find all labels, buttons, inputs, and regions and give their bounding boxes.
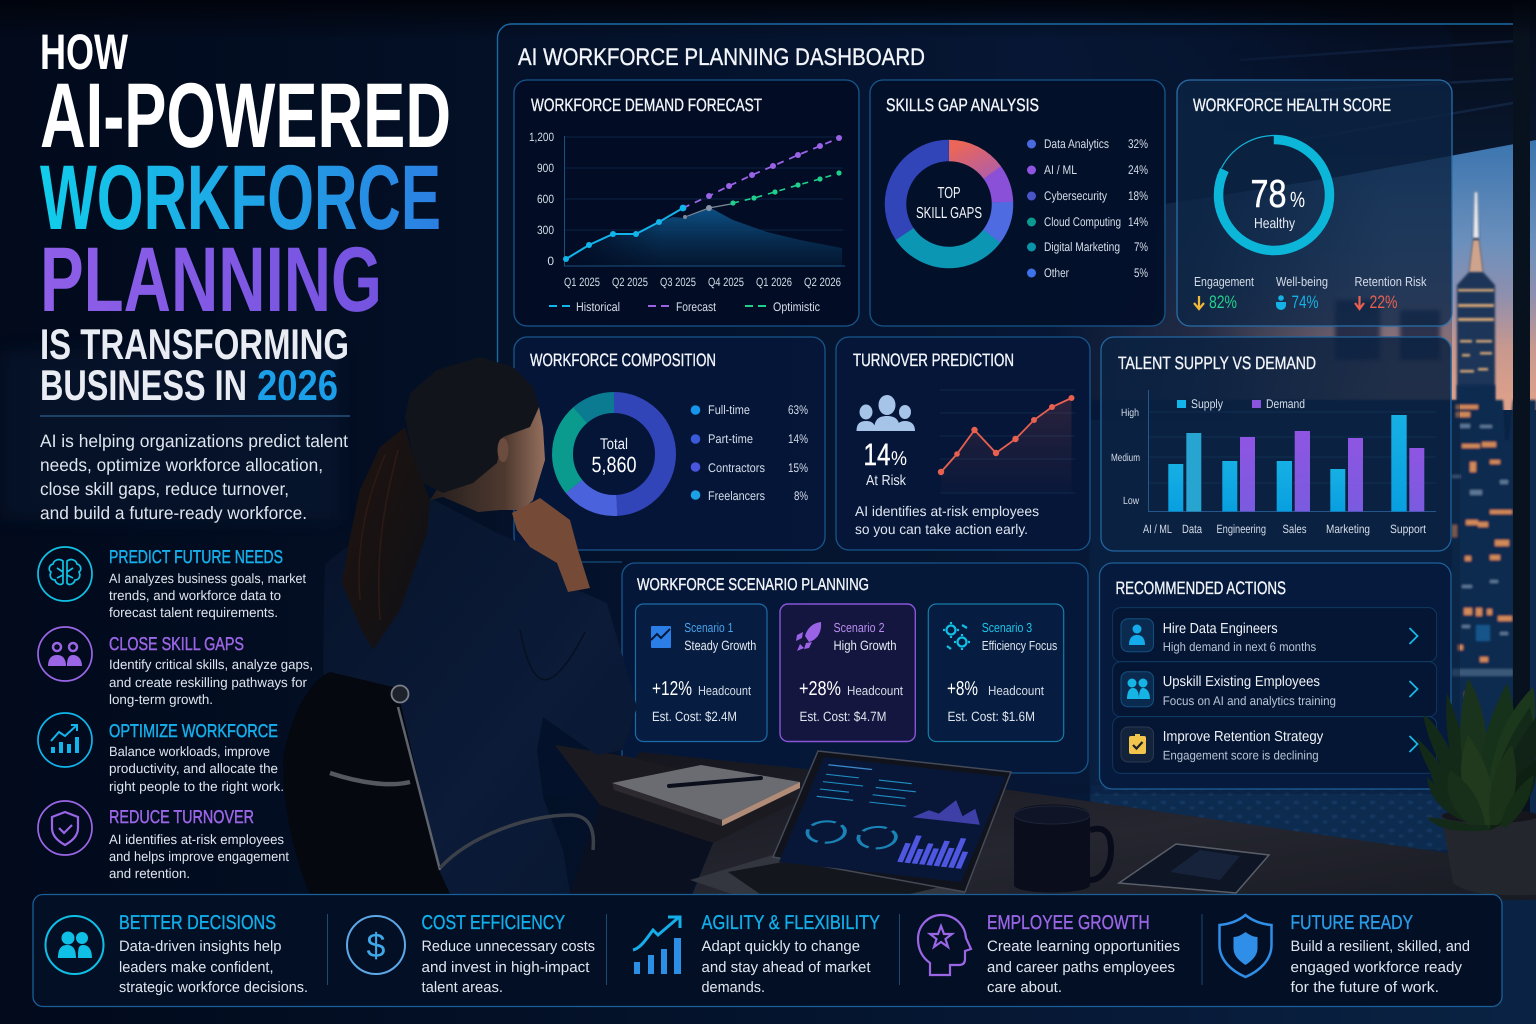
feature: reduce turnover: AI identifies at-risk employees: [109, 832, 284, 847]
line chart: 600: [537, 192, 554, 206]
health metrics: 22%: [1370, 292, 1398, 312]
action: hire data engineers: [1113, 608, 1437, 662]
composition legend: Contractors: [708, 461, 765, 475]
city below the window: [1090, 385, 1536, 850]
chart legend: Forecast: [676, 300, 716, 314]
bar chart legend: Demand: [1266, 397, 1305, 411]
main title: 2026: [257, 362, 338, 410]
feature: close skill gaps: [38, 627, 313, 707]
skills heading: SKILLS GAP ANALYSIS: [886, 95, 1039, 115]
scenario heading: WORKFORCE SCENARIO PLANNING: [637, 575, 869, 594]
laptop: [690, 751, 1011, 895]
feature: optimize workforce: [38, 713, 284, 794]
scenario card 1: steady growth: Scenario 1: [684, 620, 733, 635]
dim city on the left: [0, 350, 340, 520]
scenario card 3: efficiency focus: [928, 604, 1064, 742]
action: hire data engineers: Hire Data Engineers: [1163, 621, 1278, 637]
turnover description: AI identifies at-risk employees: [855, 503, 1039, 519]
intro paragraph: needs, optimize workforce allocation,: [40, 455, 323, 475]
line chart: Q2 2025: [612, 275, 648, 289]
icon: shield: [1220, 915, 1272, 977]
benefit: cost efficiency: Reduce unnecessary costs: [422, 938, 595, 955]
bar chart: Support: [1390, 522, 1427, 536]
turnover description: so you can take action early.: [855, 521, 1028, 537]
benefit: agility and flexibility: demands.: [702, 979, 765, 996]
line chart: Q1 2026: [756, 275, 792, 289]
coffee mug: [1014, 804, 1111, 892]
scenario card 3: efficiency focus: Efficiency Focus: [982, 638, 1058, 653]
main title: AI-POWERED: [40, 65, 451, 167]
donut chart: total 5,860: 5,860: [592, 452, 636, 477]
businesswoman seen from behind: [283, 357, 637, 894]
main title: WORKFORCE: [40, 147, 441, 249]
main title: IS TRANSFORMING: [40, 321, 349, 369]
panel: recommended actions: [1100, 563, 1451, 789]
hair: [405, 357, 539, 493]
at-risk percentage: At Risk: [866, 473, 907, 489]
benefit: agility and flexibility: and stay ahead of market: [702, 959, 871, 976]
panel: turnover prediction: [836, 337, 1090, 550]
dashboard heading: AI WORKFORCE PLANNING DASHBOARD: [518, 44, 925, 71]
action: improve retention strategy: Improve Retention Strategy: [1163, 729, 1324, 745]
intro paragraph: [40, 431, 348, 523]
action: improve retention strategy: [1113, 717, 1437, 773]
health metrics: 74%: [1292, 292, 1318, 312]
panel: skills gap analysis: [870, 80, 1165, 326]
skills legend: 14%: [1128, 215, 1148, 229]
skills legend: 7%: [1134, 240, 1148, 254]
action: upskill existing employees: Focus on AI and analytics training: [1163, 694, 1336, 708]
feature: predict future needs: forecast talent requirements.: [109, 605, 278, 620]
panel: talent supply vs demand: [1101, 337, 1451, 551]
feature: reduce turnover: and retention.: [109, 866, 190, 881]
panel: workforce composition: [514, 337, 825, 550]
line chart: 300: [537, 223, 554, 237]
feature: close skill gaps: and create reskilling pathways for: [109, 675, 307, 690]
tablet: [1119, 844, 1269, 893]
feature: predict future needs: AI analyzes business goals, market: [109, 571, 306, 586]
panel: workforce demand forecast: [514, 80, 859, 326]
dim towers behind the panels: [1335, 300, 1440, 360]
chart legend: Optimistic: [773, 300, 820, 314]
actions heading: RECOMMENDED ACTIONS: [1116, 578, 1286, 598]
line chart: Q1 2025: [564, 275, 600, 289]
feature: predict future needs: [38, 546, 306, 620]
benefit: employee growth: EMPLOYEE GROWTH: [987, 912, 1150, 934]
line chart: Q2 2026: [804, 275, 841, 289]
feature: reduce turnover: [38, 801, 289, 881]
action: upskill existing employees: [1113, 662, 1437, 717]
benefit: cost efficiency: talent areas.: [422, 979, 503, 996]
benefit: better decisions: Data-driven insights help: [119, 938, 282, 955]
risk trend chart: [938, 390, 1075, 493]
bottom benefits band: [33, 894, 1502, 1006]
radial gauge 78%: [1218, 136, 1330, 250]
bar chart: [1111, 390, 1436, 536]
scenario card 1: steady growth: Est. Cost: $2.4M: [652, 709, 737, 724]
benefit: employee growth: Create learning opportunities: [987, 938, 1180, 955]
ceiling: [1050, 0, 1536, 222]
line chart: 900: [537, 161, 554, 175]
donut chart: total 5,860: [541, 381, 687, 527]
icon: people at risk: [856, 395, 915, 431]
health metrics: Well-being: [1276, 274, 1328, 289]
skills legend: [1027, 137, 1148, 280]
action: improve retention strategy: Engagement score is declining: [1163, 748, 1319, 762]
skills legend: AI / ML: [1044, 163, 1077, 177]
feature: close skill gaps: Identify critical skills, analyze gaps,: [109, 657, 313, 672]
benefit: future ready: Build a resilient, skilled, and: [1290, 938, 1470, 955]
composition legend: Freelancers: [708, 489, 765, 503]
office desk: [555, 745, 1536, 900]
hand on chin: [512, 498, 590, 592]
scenario card 2: high growth: [780, 604, 915, 742]
benefit: future ready: engaged workforce ready: [1290, 959, 1462, 976]
chart legend: Historical: [576, 300, 620, 314]
composition legend: [691, 403, 808, 503]
scenario card 3: efficiency focus: +8%: [947, 678, 978, 700]
icon: two people: [38, 627, 92, 681]
radial gauge 78%: 78: [1250, 173, 1286, 216]
scenario card 2: high growth: Headcount: [847, 683, 903, 698]
main title: BUSINESS IN: [40, 362, 247, 410]
icon: brain: [38, 547, 92, 601]
skills legend: 18%: [1128, 189, 1148, 203]
jacket: [324, 498, 637, 894]
skills legend: Cybersecurity: [1044, 189, 1108, 203]
benefit: agility and flexibility: AGILITY & FLEXIBILITY: [702, 912, 880, 934]
radial gauge 78%: %: [1290, 187, 1305, 212]
icon: shield with check: [38, 801, 92, 855]
skills legend: 5%: [1134, 266, 1148, 280]
turnover heading: TURNOVER PREDICTION: [853, 350, 1014, 370]
intro paragraph: and build a future-ready workforce.: [40, 503, 307, 523]
skills legend: Data Analytics: [1044, 137, 1109, 151]
action: upskill existing employees: Upskill Existing Employees: [1163, 674, 1320, 690]
scenario card 1: steady growth: Steady Growth: [684, 638, 756, 653]
benefit: better decisions: [46, 912, 308, 996]
health metrics: [1194, 274, 1427, 312]
main title: PLANNING: [40, 229, 382, 331]
composition legend: Part-time: [708, 432, 753, 446]
distant skyscraper: [1457, 192, 1495, 410]
feature: optimize workforce: right people to the right work.: [109, 779, 284, 794]
composition legend: 15%: [788, 461, 808, 475]
benefit: cost efficiency: [347, 912, 595, 996]
bar chart legend: [1177, 397, 1305, 411]
panel: workforce health score: [1177, 80, 1452, 326]
skills legend: Digital Marketing: [1044, 240, 1120, 254]
bar chart: High: [1121, 407, 1139, 419]
feature: close skill gaps: long-term growth.: [109, 692, 213, 707]
panel: AI workforce planning dashboard: [497, 24, 1513, 794]
donut chart: top skill gaps: TOP: [938, 185, 960, 202]
benefit: future ready: for the future of work.: [1290, 979, 1439, 996]
line chart: 0: [547, 254, 554, 268]
benefit: employee growth: [918, 912, 1180, 996]
panel: workforce scenario planning: [575, 562, 1088, 773]
composition legend: 14%: [788, 432, 808, 446]
forecast heading: WORKFORCE DEMAND FORECAST: [531, 95, 762, 115]
benefit: better decisions: strategic workforce decisions.: [119, 979, 308, 996]
at-risk percentage: %: [891, 448, 907, 470]
scenario card 1: steady growth: +12%: [652, 678, 692, 700]
skills legend: Cloud Computing: [1044, 215, 1121, 229]
benefit: employee growth: and career paths employees: [987, 959, 1175, 976]
line chart: [529, 130, 845, 289]
composition legend: 63%: [788, 403, 808, 417]
composition heading: WORKFORCE COMPOSITION: [530, 350, 716, 370]
health metrics: 82%: [1209, 292, 1237, 312]
benefit: better decisions: leaders make confident,: [119, 959, 274, 976]
feature: predict future needs: PREDICT FUTURE NEEDS: [109, 546, 283, 567]
scenario card 3: efficiency focus: Scenario 3: [982, 620, 1032, 635]
intro paragraph: AI is helping organizations predict talent: [40, 431, 348, 451]
talent heading: TALENT SUPPLY VS DEMAND: [1118, 353, 1316, 373]
neck and face: [430, 407, 545, 512]
feature: close skill gaps: CLOSE SKILL GAPS: [109, 633, 244, 654]
bar chart: Low: [1123, 495, 1139, 507]
skills legend: 32%: [1128, 137, 1148, 151]
line chart: 1,200: [529, 130, 554, 144]
potted plant: [1417, 678, 1536, 895]
window frame: [1513, 0, 1530, 860]
skills legend: Other: [1044, 266, 1069, 280]
icon: growth chart: [38, 713, 92, 767]
line chart: Q3 2025: [660, 275, 696, 289]
office chair: [283, 672, 593, 894]
icon: rising chart: [633, 917, 681, 974]
bar chart: Marketing: [1326, 522, 1370, 536]
benefit: cost efficiency: and invest in high-impact: [422, 959, 590, 976]
laptop screen: [779, 757, 1006, 882]
feature: reduce turnover: REDUCE TURNOVER: [109, 806, 254, 827]
feature: optimize workforce: Balance workloads, improve: [109, 744, 270, 759]
feature: reduce turnover: and helps improve engagement: [109, 849, 289, 864]
bar chart: Sales: [1282, 522, 1306, 536]
benefit: agility and flexibility: [633, 912, 880, 996]
scenario card 2: high growth: +28%: [799, 678, 841, 700]
main title: HOW: [40, 24, 129, 80]
benefit: future ready: [1220, 912, 1470, 996]
scenario card 3: efficiency focus: Headcount: [988, 683, 1044, 698]
turnover description: [855, 503, 1039, 537]
benefit: employee growth: care about.: [987, 979, 1062, 996]
action: hire data engineers: High demand in next 6 months: [1163, 640, 1316, 654]
notebook and pen: [612, 765, 800, 826]
bar chart: Medium: [1111, 452, 1140, 464]
bar chart: AI / ML: [1143, 522, 1172, 536]
bar chart legend: Supply: [1191, 397, 1224, 411]
icon: people: [46, 916, 104, 974]
feature: optimize workforce: OPTIMIZE WORKFORCE: [109, 720, 278, 741]
scenario card 1: steady growth: Headcount: [698, 683, 751, 698]
ponytail: [342, 427, 430, 650]
donut chart: total 5,860: Total: [600, 436, 628, 453]
benefit: cost efficiency: COST EFFICIENCY: [422, 912, 565, 934]
composition legend: 8%: [794, 489, 808, 503]
skills legend: 24%: [1128, 163, 1148, 177]
benefit: future ready: FUTURE READY: [1290, 912, 1413, 934]
at-risk percentage: 14: [864, 437, 890, 472]
icon: dollar coin: $: [367, 927, 386, 965]
at-risk percentage: [864, 437, 907, 489]
benefit: agility and flexibility: Adapt quickly to change: [702, 938, 860, 955]
composition legend: Full-time: [708, 403, 750, 417]
icon: dollar coin: [347, 916, 405, 974]
scenario card 1: steady growth: [636, 604, 767, 742]
bar chart: Data: [1182, 522, 1202, 536]
scenario card 2: high growth: Est. Cost: $4.7M: [800, 709, 886, 724]
bar chart: Engineering: [1216, 522, 1266, 536]
intro paragraph: close skill gaps, reduce turnover,: [40, 479, 289, 499]
chart legend: [549, 300, 820, 314]
scenario card 3: efficiency focus: Est. Cost: $1.6M: [948, 709, 1035, 724]
scenario card 2: high growth: Scenario 2: [834, 620, 884, 635]
scenario card 2: high growth: High Growth: [834, 638, 896, 653]
radial gauge 78%: Healthy: [1254, 216, 1296, 232]
line chart: Q4 2025: [708, 275, 744, 289]
main title: [40, 24, 451, 410]
donut chart: top skill gaps: [874, 129, 1024, 279]
health metrics: Retention Risk: [1354, 274, 1427, 289]
icon: head with star: [918, 915, 971, 975]
health heading: WORKFORCE HEALTH SCORE: [1193, 95, 1391, 115]
donut chart: top skill gaps: SKILL GAPS: [916, 205, 982, 222]
benefit: better decisions: BETTER DECISIONS: [119, 912, 276, 934]
health metrics: Engagement: [1194, 274, 1254, 289]
feature: optimize workforce: productivity, and allocate the: [109, 761, 278, 776]
feature: predict future needs: trends, and workforce data to: [109, 588, 281, 603]
ear: [498, 438, 508, 462]
